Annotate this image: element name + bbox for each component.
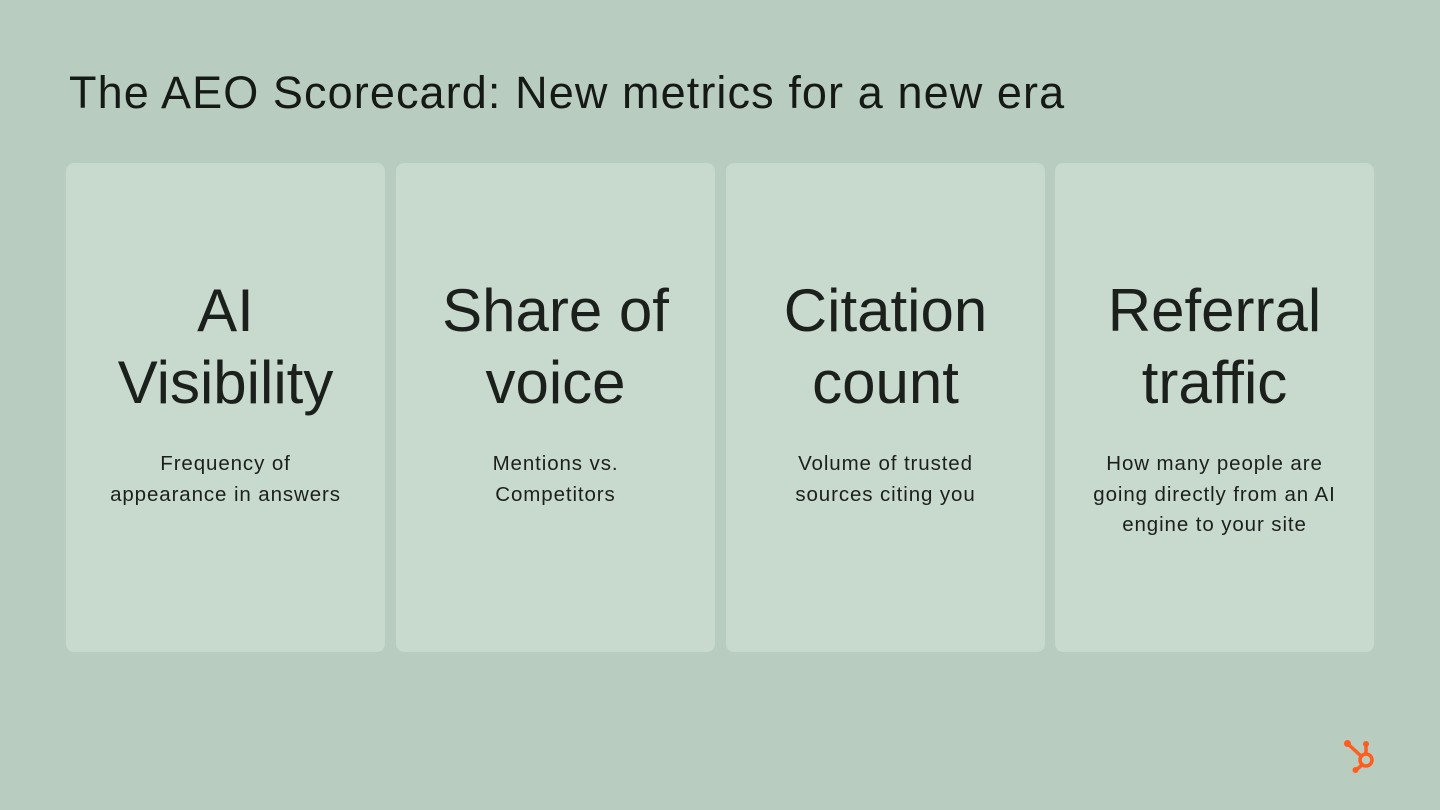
text: description: Competitors [495, 482, 616, 506]
heading: Share of voice: voice [485, 349, 626, 416]
heading: Referral traffic: traffic [1142, 349, 1287, 416]
title: The AEO Scorecard: New metrics for a new era [69, 67, 1065, 118]
heading: Citation count: Citation [784, 277, 987, 344]
heading: Referral traffic: Referral [1108, 277, 1321, 344]
heading: AI Visibility: Visibility [118, 349, 333, 416]
text: description: How many people are [1106, 452, 1323, 475]
panel: AI Visibility [66, 163, 385, 652]
text: description [1093, 452, 1336, 536]
text: description: appearance in answers [110, 482, 341, 506]
heading: Citation count: count [812, 349, 959, 416]
text: description: sources citing you [795, 482, 976, 506]
text: description [493, 452, 618, 506]
text: description: Frequency of [160, 452, 291, 475]
heading: Referral traffic [1108, 277, 1321, 416]
icon: hubspot logo [1344, 740, 1374, 773]
panel: Share of voice [396, 163, 715, 652]
heading: AI Visibility [118, 277, 334, 416]
text: description: going directly from an AI [1093, 482, 1336, 506]
panel: Referral traffic [1055, 163, 1374, 652]
heading: Citation count [784, 277, 987, 416]
text: description: engine to your site [1122, 513, 1307, 536]
heading: Share of voice [442, 277, 669, 416]
heading: Share of voice: Share of [442, 277, 669, 344]
text: description [110, 452, 341, 506]
panel: Citation count [726, 163, 1045, 652]
text: description: Volume of trusted [798, 452, 973, 475]
text: description [795, 452, 976, 506]
text: description: Mentions vs. [493, 452, 618, 475]
heading: AI Visibility: AI [197, 277, 254, 344]
